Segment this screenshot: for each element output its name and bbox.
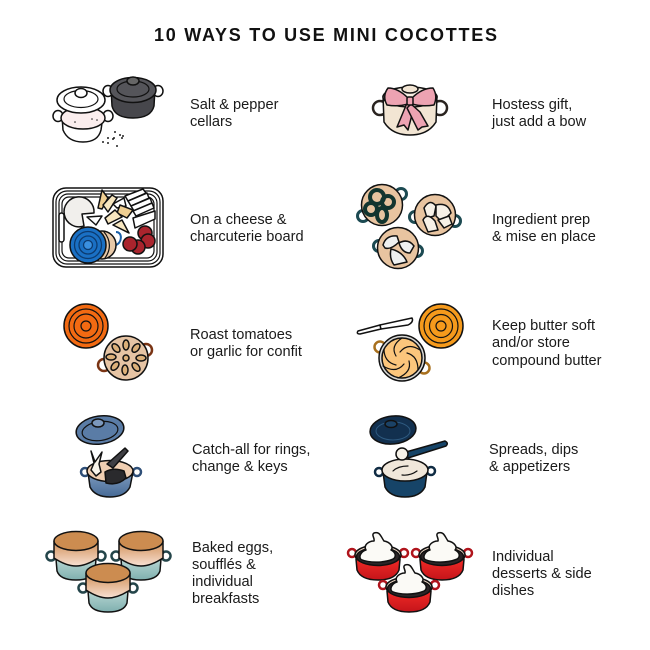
- text: baked eggs: Baked eggs,: [192, 540, 273, 556]
- icon: hostess gift with bow: [373, 85, 447, 135]
- icon: individual desserts: [348, 533, 472, 612]
- text: cheese and charcuterie board: charcuterie board: [190, 229, 304, 245]
- text: ingredient prep: Ingredient prep: [492, 212, 590, 228]
- text: catch-all: change & keys: [192, 459, 288, 475]
- icon: ingredient prep: [358, 184, 460, 268]
- text: baked eggs: individual: [192, 574, 253, 590]
- text: ingredient prep: & mise en place: [492, 229, 596, 245]
- icon: cheese and charcuterie board: [53, 188, 163, 267]
- text: keep butter soft: Keep butter soft: [492, 318, 595, 334]
- icon: roast tomatoes or garlic: [64, 304, 152, 380]
- icon: spreads and dips: [369, 414, 447, 497]
- icon: baked eggs souffles: [46, 532, 170, 612]
- text: keep butter soft: compound butter: [492, 353, 602, 369]
- text: hostess gift: just add a bow: [491, 114, 587, 130]
- text: roast tomatoes or garlic: Roast tomatoes: [190, 327, 292, 343]
- title: 10 WAYS TO USE MINI COCOTTES: [154, 25, 497, 45]
- text: spreads and dips: & appetizers: [489, 459, 570, 475]
- text: hostess gift: Hostess gift,: [492, 97, 572, 113]
- text: baked eggs: breakfasts: [192, 591, 259, 607]
- text: cheese and charcuterie board: On a cheese &: [190, 212, 287, 228]
- text: catch-all: Catch-all for rings,: [192, 442, 310, 458]
- icon: catch-all cocotte: [74, 413, 141, 497]
- text: baked eggs: soufflés &: [192, 557, 256, 573]
- text: roast tomatoes or garlic: or garlic for confit: [190, 344, 302, 360]
- text: salt and pepper: cellars: [190, 114, 232, 130]
- icon: salt and pepper cellars: [53, 77, 163, 147]
- text: individual desserts: desserts & side: [492, 566, 592, 582]
- text: keep butter soft: and/or store: [492, 335, 570, 351]
- text: salt and pepper: Salt & pepper: [190, 97, 278, 113]
- text: spreads and dips: Spreads, dips: [489, 442, 578, 458]
- text: individual desserts: dishes: [492, 583, 534, 599]
- icon: butter with knife: [357, 304, 463, 381]
- text: individual desserts: Individual: [492, 549, 554, 565]
